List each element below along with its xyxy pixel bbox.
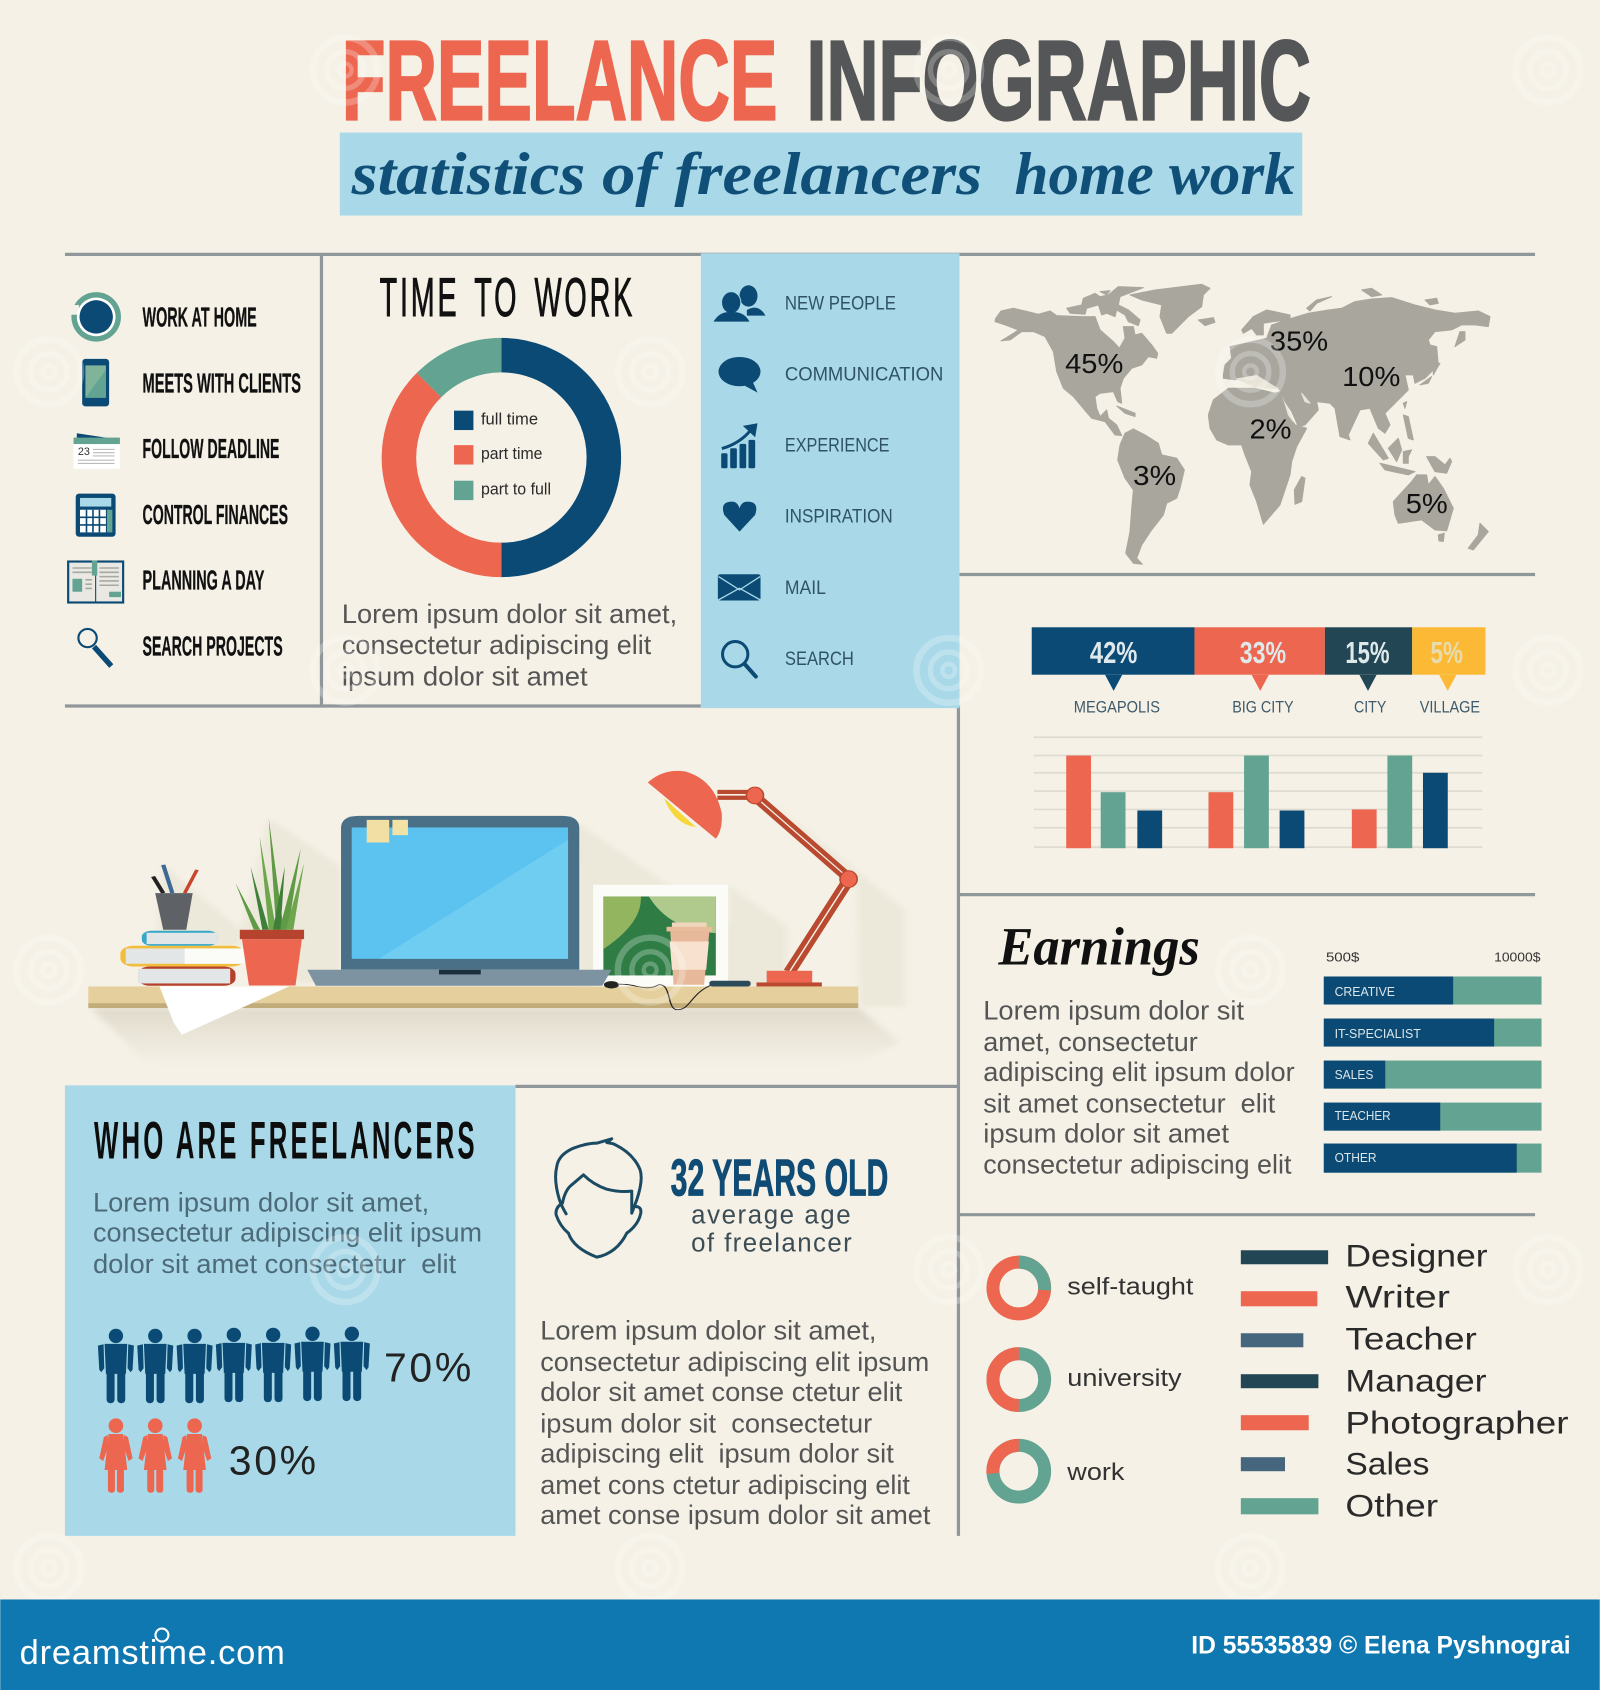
panel: occupations legend [1241, 1238, 1568, 1523]
stacked bar: place of living: VILLAGE [1420, 698, 1480, 716]
icon: speech bubble [719, 357, 761, 393]
map labels: 45% [1065, 348, 1123, 379]
map labels: 10% [1342, 361, 1400, 392]
panel: earnings [983, 917, 1542, 1180]
text block: Lorem ipsum dolor sit amet, [342, 599, 677, 629]
caption: average age [691, 1201, 851, 1229]
legend [454, 411, 551, 500]
earnings bar chart: IT-SPECIALIST [1335, 1026, 1421, 1041]
icons [714, 285, 766, 677]
subtitle banner: statistics of freelancers [351, 141, 982, 208]
text block: amet conse ipsum dolor sit amet [540, 1500, 931, 1530]
earnings bar chart: 500$ [1326, 949, 1359, 964]
shelf shadow [91, 1008, 899, 1066]
panel: occupations legend: Manager [1345, 1363, 1487, 1398]
picture frame [593, 885, 728, 986]
text block: consectetur adipiscing elit [342, 630, 652, 660]
label: search projects: SEARCH PROJECTS [143, 630, 283, 661]
earnings bar chart: CREATIVE [1335, 984, 1395, 999]
stacked bar: place of living: 15% [1345, 637, 1390, 670]
stacked bar: place of living: 33% [1240, 637, 1286, 670]
text block: consectetur adipiscing elit [983, 1150, 1292, 1180]
map: eurasia, africa and oceania [1208, 288, 1490, 550]
subtitle banner: home work [1014, 141, 1295, 208]
text block: amet cons ctetur adipiscing elit [540, 1470, 910, 1500]
map labels: 35% [1270, 325, 1328, 356]
panel: education donuts [993, 1262, 1194, 1497]
earnings bar chart: 10000$ [1494, 949, 1540, 964]
footer bar: ID 55535839 © Elena Pyshnograi [1191, 1632, 1571, 1659]
plant [236, 818, 304, 930]
icon: phone [82, 359, 109, 406]
label: follow deadline: FOLLOW DEADLINE [143, 433, 279, 464]
illustration: desk with laptop [88, 771, 905, 1066]
icon: envelope [718, 574, 761, 601]
panel: occupations legend: Writer [1345, 1279, 1450, 1314]
earnings bar chart: TEACHER [1335, 1108, 1391, 1123]
plant pot [240, 930, 304, 985]
label: meets with clients: MEETS WITH CLIENTS [143, 367, 301, 398]
icon: magnifier [78, 629, 111, 666]
legend: part time [481, 445, 542, 463]
icon: heart [723, 502, 756, 532]
icon: calendar: 23 [78, 446, 90, 458]
map labels: 2% [1249, 414, 1291, 445]
title: FREELANCE [342, 18, 777, 144]
donut: self-taught [993, 1262, 1045, 1314]
text block: amet, consectetur [983, 1027, 1198, 1057]
icon: work at home [69, 292, 121, 342]
panel: occupations legend: Photographer [1345, 1405, 1568, 1440]
earphones and phone [604, 981, 751, 1010]
pictogram: women 30% [99, 1418, 211, 1493]
icon: planner [67, 560, 124, 604]
text block: dolor sit amet conse ctetur elit [540, 1377, 903, 1407]
text block [342, 599, 677, 691]
label: control finances: CONTROL FINANCES [143, 499, 288, 530]
text block: sit amet consectetur elit [983, 1088, 1276, 1118]
heading: TIME TO WORK [380, 266, 635, 328]
labels: MAIL [785, 577, 826, 599]
panel: occupations legend: Teacher [1345, 1321, 1477, 1356]
labels: SEARCH [785, 648, 854, 670]
caption [691, 1201, 852, 1257]
label: work: work [1066, 1460, 1125, 1486]
laptop [307, 816, 611, 986]
text block [983, 996, 1295, 1180]
text block: Lorem ipsum dolor sit [983, 996, 1245, 1026]
bar chart [1034, 737, 1482, 848]
stat: 30%: 30% [229, 1437, 316, 1483]
map: americas and greenland [995, 284, 1215, 564]
stacked bar: place of living: 42% [1090, 637, 1137, 670]
labels [785, 292, 943, 670]
earnings bar chart: OTHER [1335, 1150, 1377, 1165]
legend: part to full [481, 481, 551, 499]
books [120, 931, 245, 986]
stat: 70%: 70% [384, 1345, 471, 1391]
headline: 32 YEARS OLD [671, 1148, 888, 1206]
shelf [88, 986, 858, 1008]
paper [159, 986, 289, 1035]
map labels [1065, 325, 1448, 519]
text block: consectetur adipiscing elit ipsum [540, 1347, 929, 1377]
map labels: 5% [1406, 488, 1448, 519]
stacked bar: place of living: 5% [1431, 637, 1463, 670]
footer bar [0, 1599, 1600, 1690]
subtitle banner [340, 133, 1302, 216]
icon: calendar [74, 433, 120, 469]
text block: ipsum dolor sit amet [342, 661, 588, 691]
stacked bar: place of living: BIG CITY [1232, 698, 1294, 716]
desk lamp [648, 771, 857, 986]
label: self-taught: self-taught [1067, 1274, 1194, 1300]
label: university: university [1067, 1366, 1182, 1392]
coffee cup [667, 922, 712, 985]
stacked bar: place of living: CITY [1354, 698, 1387, 716]
text block: Lorem ipsum dolor sit amet, [540, 1316, 877, 1346]
labels: INSPIRATION [785, 506, 893, 528]
text block: adipiscing elit ipsum dolor [983, 1057, 1295, 1087]
pencil cup [153, 865, 197, 930]
text block: adipiscing elit ipsum dolor sit [540, 1439, 894, 1469]
caption: of freelancer [691, 1229, 852, 1257]
panel: occupations legend: Sales [1345, 1446, 1429, 1481]
donut: work [993, 1445, 1045, 1497]
panel: who are freelancers [65, 1085, 515, 1536]
text block [93, 1187, 482, 1279]
icon: calculator [76, 494, 116, 537]
panel: occupations legend: Other [1345, 1488, 1438, 1523]
labels: COMMUNICATION [785, 363, 943, 385]
icon: growth chart [721, 423, 758, 468]
icon: search [723, 642, 756, 677]
text block: ipsum dolor sit amet [983, 1118, 1229, 1148]
text block [540, 1316, 931, 1530]
long shadows [155, 793, 905, 1006]
panel: average age [540, 1139, 931, 1530]
text block: Lorem ipsum dolor sit amet, [93, 1187, 429, 1217]
heading: Earnings [997, 917, 1200, 977]
legend: full time [481, 411, 538, 429]
donut chart [399, 355, 604, 560]
panel: who are freelancers: WHO ARE FREELANCERS [94, 1112, 478, 1171]
panel: time to work [342, 266, 677, 691]
icon: head outline [556, 1139, 641, 1257]
donut: university [993, 1354, 1045, 1405]
title: INFOGRAPHIC [806, 18, 1311, 144]
label: work at home: WORK AT HOME [143, 302, 257, 333]
panel: occupations legend: Designer [1345, 1238, 1488, 1273]
labels: EXPERIENCE [785, 435, 890, 457]
earnings bar chart: SALES [1335, 1067, 1374, 1082]
text block: ipsum dolor sit consectetur [540, 1408, 872, 1438]
panel: blue benefits list [701, 253, 960, 708]
panel: activities list [67, 292, 301, 666]
text block: dolor sit amet consectetur elit [93, 1249, 457, 1279]
icon: new people [714, 285, 766, 322]
stacked bar: place of living: MEGAPOLIS [1074, 698, 1160, 716]
stacked bar: place of living [1032, 627, 1485, 716]
labels: NEW PEOPLE [785, 292, 896, 314]
map labels: 3% [1133, 460, 1176, 491]
footer bar: dreamstime.com [20, 1634, 285, 1672]
pictogram: men 70% [98, 1327, 370, 1403]
world map [995, 284, 1490, 564]
text block: consectetur adipiscing elit ipsum [93, 1218, 482, 1248]
label: planning a day: PLANNING A DAY [143, 565, 264, 596]
earnings bar chart [1324, 949, 1542, 1173]
